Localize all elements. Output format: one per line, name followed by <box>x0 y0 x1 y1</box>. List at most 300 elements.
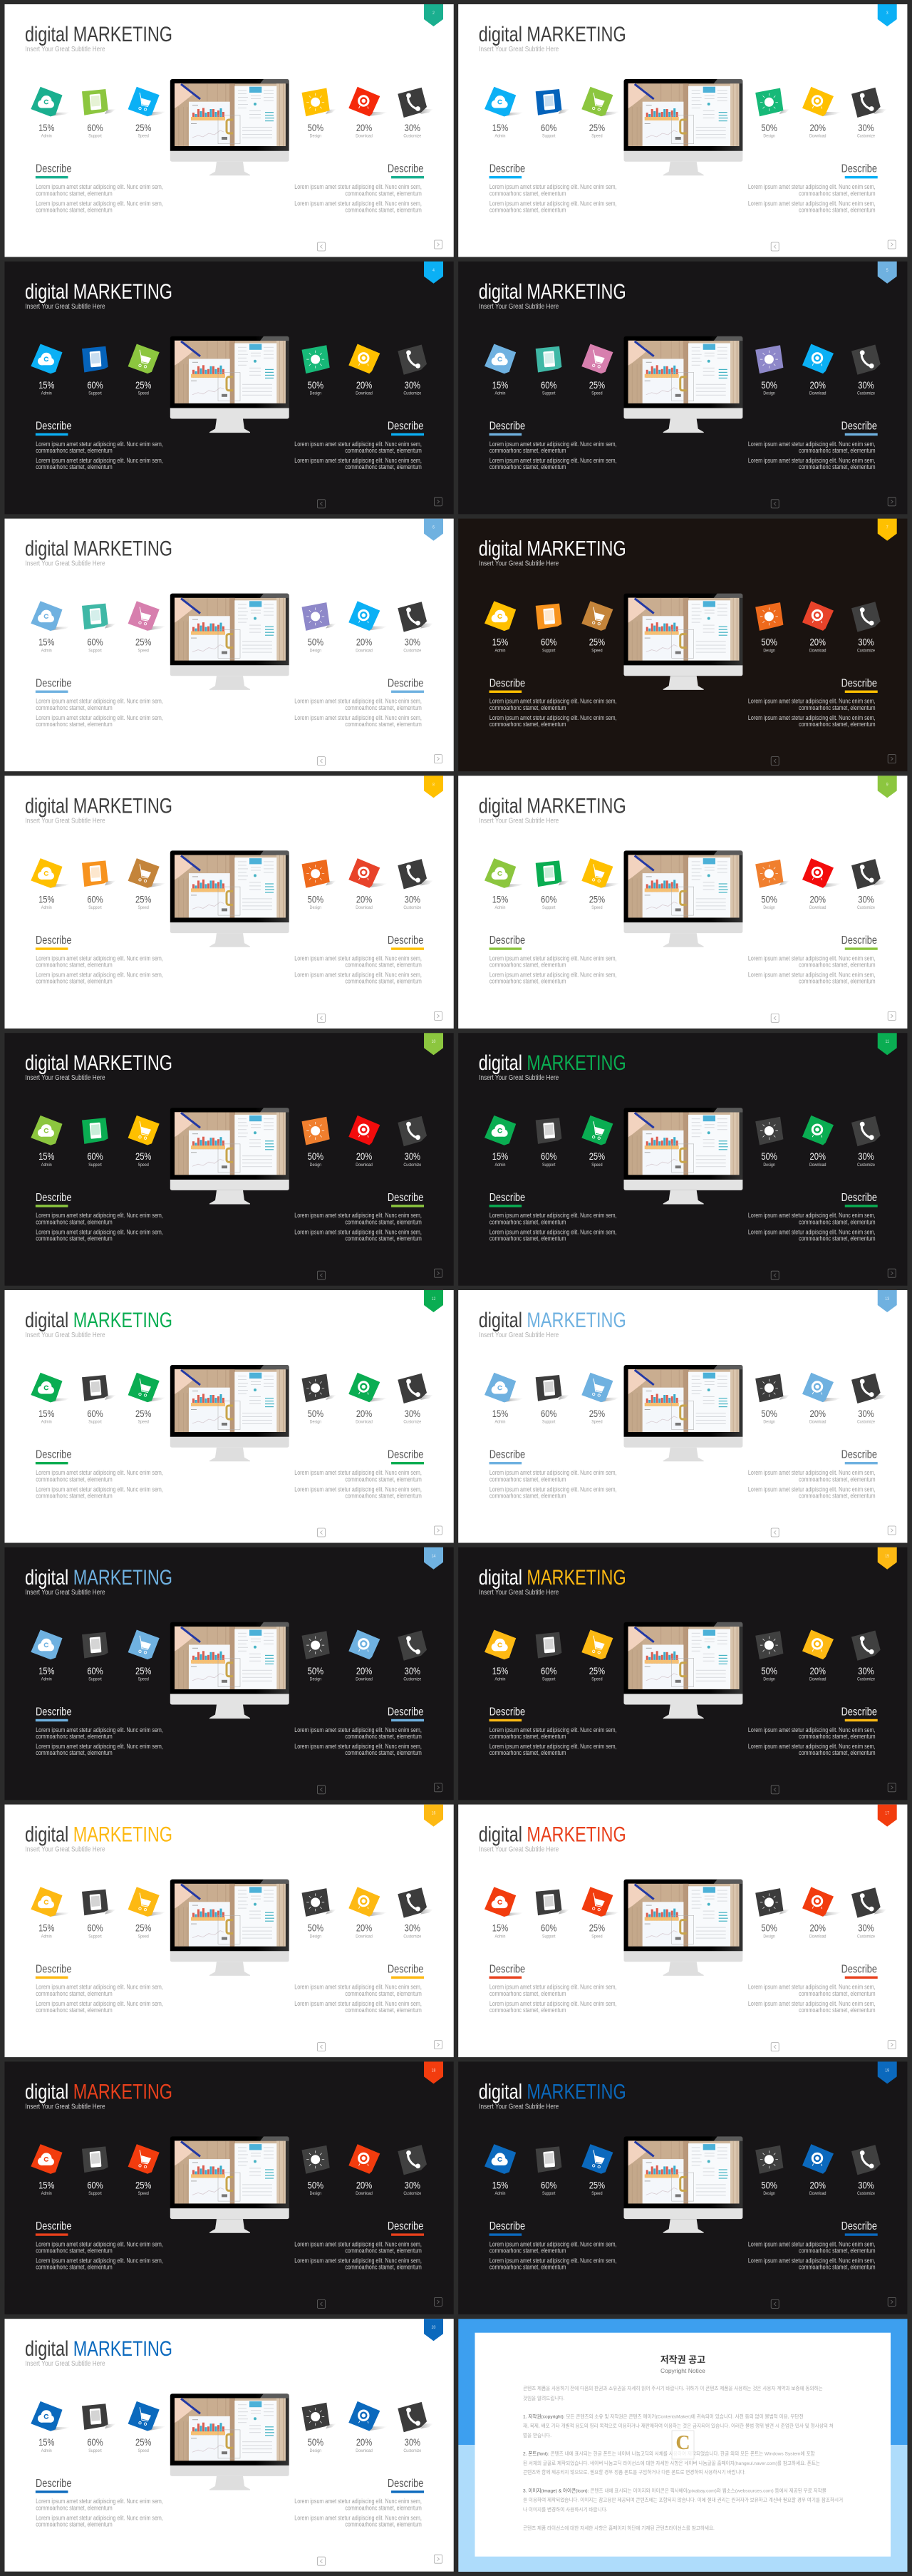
value: 20% <box>356 123 372 133</box>
stat: Speed <box>581 858 613 910</box>
heading: Describe <box>36 677 71 690</box>
left text block: commoarhonc stamet, elementum <box>489 2247 566 2255</box>
heading: Describe <box>36 1192 71 1204</box>
label: Speed <box>138 2448 149 2453</box>
label: Support <box>88 2448 102 2453</box>
heading: Describe <box>388 1963 423 1976</box>
left text block: commoarhonc stamet, elementum <box>36 463 113 470</box>
left text block: Lorem ipsum amet stetur adipiscing elit. Nunc enim sem, <box>489 714 617 721</box>
monitor <box>170 1365 289 1461</box>
label: Admin <box>495 1420 505 1425</box>
notice body: 2. 폰트(font): 콘텐츠 내에 표시되는 한글 폰트는 네이버 나눔고딕의 서체를 사용하여 제작되었습니다. 한글 외의 모든 폰트는 Windows System에 포함 <box>523 2451 815 2457</box>
stat: Speed <box>581 1373 613 1425</box>
underline <box>36 691 68 693</box>
previous arrow <box>318 1014 325 1022</box>
icon: sun <box>755 88 783 116</box>
page tag: 16 <box>432 1811 436 1816</box>
stat: Admin <box>31 344 63 396</box>
icon shadows <box>51 880 433 887</box>
value: 20% <box>810 637 826 648</box>
slide background <box>458 1547 907 1800</box>
left text block: Lorem ipsum amet stetur adipiscing elit. Nunc enim sem, <box>36 2257 163 2265</box>
stat: Customize <box>851 88 881 139</box>
icon shadows <box>51 1910 433 1917</box>
value: 25% <box>135 637 151 648</box>
left text block <box>36 677 163 728</box>
left text block <box>489 1448 617 1500</box>
subtitle: Insert Your Great Subtitle Here <box>479 1331 559 1339</box>
stat: Admin <box>484 1373 516 1425</box>
underline <box>845 433 878 436</box>
right text block: commoarhonc stamet, elementum <box>345 463 422 470</box>
title: digital MARKETING <box>479 794 626 818</box>
left text block: commoarhonc stamet, elementum <box>489 1990 566 1997</box>
right text block <box>748 2220 878 2271</box>
label: Admin <box>41 2192 52 2196</box>
left text block: commoarhonc stamet, elementum <box>36 1733 113 1740</box>
stat: Design <box>302 345 330 396</box>
right text block: commoarhonc stamet, elementum <box>345 721 422 728</box>
monitor <box>170 594 289 690</box>
right text block: Lorem ipsum amet stetur adipiscing elit. Nunc enim sem, <box>294 714 422 721</box>
right text block: Lorem ipsum amet stetur adipiscing elit. Nunc enim sem, <box>748 183 876 190</box>
left text block: commoarhonc stamet, elementum <box>36 721 113 728</box>
icon: phone <box>398 345 427 375</box>
underline <box>391 1719 424 1721</box>
slide background <box>458 4 907 257</box>
stat: Customize <box>851 859 881 910</box>
left text block: commoarhonc stamet, elementum <box>489 1235 566 1242</box>
page tag <box>424 4 443 26</box>
right text block: commoarhonc stamet, elementum <box>799 721 876 728</box>
left text block <box>36 2478 163 2528</box>
label: Customize <box>857 906 876 910</box>
icon: cart <box>128 601 160 631</box>
right text block: commoarhonc stamet, elementum <box>799 978 876 985</box>
icon: mobile <box>536 89 561 115</box>
notice body: 1. 저작권(copyright): 모든 콘텐츠의 소유 및 저작권은 콘텐츠 메이커(ContentsMaker)에 귀속되어 있습니다. 사전 동의 없이 불법적 이용, 무단전 <box>523 2413 804 2419</box>
value: 15% <box>38 2180 54 2191</box>
stat: Admin <box>31 87 63 139</box>
label: Design <box>763 1420 775 1425</box>
subtitle: Insert Your Great Subtitle Here <box>26 45 105 53</box>
icon: phone <box>851 345 881 375</box>
label: Download <box>809 134 826 139</box>
stat: Support <box>82 346 108 396</box>
left text block: Lorem ipsum amet stetur adipiscing elit. Nunc enim sem, <box>36 1486 163 1493</box>
panel: slide 16 <box>4 1805 454 2057</box>
label: Design <box>763 906 775 910</box>
stat: Customize <box>851 2145 881 2196</box>
icon shadows <box>51 2423 433 2431</box>
label: Support <box>88 649 102 654</box>
label: Design <box>763 649 775 654</box>
icon: target <box>348 2401 380 2431</box>
icon: sun <box>302 345 330 373</box>
icon: mobile <box>82 2404 108 2430</box>
value: 60% <box>87 2180 103 2191</box>
stat: Support <box>82 2404 108 2453</box>
subtitle: Insert Your Great Subtitle Here <box>26 1588 105 1596</box>
label: Download <box>809 2192 826 2196</box>
stat: Speed <box>128 858 160 910</box>
slide background <box>4 1033 454 1286</box>
icon: phone <box>398 88 427 118</box>
left text block <box>36 1192 163 1242</box>
label: Design <box>310 134 321 139</box>
icon: phone <box>851 1631 881 1661</box>
value: 30% <box>858 894 874 905</box>
icon: sun <box>302 1631 330 1659</box>
label: Admin <box>41 1420 52 1425</box>
label: Support <box>88 391 102 396</box>
left text block: Lorem ipsum amet stetur adipiscing elit. Nunc enim sem, <box>36 1743 163 1750</box>
icon: phone <box>851 602 881 632</box>
label: Customize <box>857 391 876 396</box>
icon: cart <box>581 1887 613 1917</box>
label: Speed <box>138 134 149 139</box>
right text block <box>294 677 424 728</box>
label: Download <box>809 1934 826 1939</box>
slide background <box>458 1290 907 1542</box>
right text block: Lorem ipsum amet stetur adipiscing elit. Nunc enim sem, <box>294 1726 422 1733</box>
icon: cart <box>128 87 160 116</box>
icon: cloud <box>31 858 63 888</box>
icon: target <box>348 601 380 631</box>
label: Customize <box>403 2192 422 2196</box>
slide background <box>4 1290 454 1542</box>
left text block: commoarhonc stamet, elementum <box>489 2264 566 2271</box>
stat: Support <box>536 604 561 654</box>
next arrow <box>888 755 896 763</box>
stat: Admin <box>484 87 516 139</box>
next arrow <box>888 1526 896 1535</box>
stat: Design <box>302 602 330 654</box>
icon: target <box>348 1629 380 1659</box>
label: Design <box>310 1420 321 1425</box>
icon: cloud <box>484 858 516 888</box>
panel: copyright notice <box>458 2319 908 2572</box>
label: Design <box>310 391 321 396</box>
icon: phone <box>398 2145 427 2175</box>
value: 20% <box>810 1151 826 1163</box>
stat: Customize <box>398 88 427 139</box>
stat: Customize <box>851 602 881 654</box>
label: Speed <box>138 391 149 396</box>
page tag <box>424 2319 443 2341</box>
left text block <box>36 2220 163 2271</box>
left text block <box>489 1192 617 1242</box>
left text block: commoarhonc stamet, elementum <box>36 1749 113 1756</box>
subtitle: Insert Your Great Subtitle Here <box>26 1845 105 1853</box>
value: 20% <box>810 123 826 133</box>
value: 60% <box>541 2180 556 2191</box>
left text block: commoarhonc stamet, elementum <box>36 2247 113 2255</box>
label: Speed <box>138 906 149 910</box>
underline <box>36 1977 68 1979</box>
label: Download <box>809 1163 826 1168</box>
stat: Speed <box>128 87 160 139</box>
label: Customize <box>857 1677 876 1682</box>
heading: Describe <box>841 934 877 947</box>
label: Speed <box>591 649 603 654</box>
subtitle: Insert Your Great Subtitle Here <box>26 1073 105 1081</box>
monitor <box>624 1108 742 1205</box>
left text block: commoarhonc stamet, elementum <box>489 1749 566 1756</box>
icon: cloud <box>484 2144 516 2174</box>
value: 30% <box>858 1408 874 1419</box>
icon: phone <box>851 859 881 889</box>
value: 25% <box>135 1666 151 1676</box>
page tag: 5 <box>886 268 888 273</box>
left text block: Lorem ipsum amet stetur adipiscing elit. Nunc enim sem, <box>489 1486 617 1493</box>
icon: target <box>802 1116 834 1145</box>
label: Support <box>88 1677 102 1682</box>
label: Speed <box>138 1163 149 1168</box>
left text block: Lorem ipsum amet stetur adipiscing elit. Nunc enim sem, <box>489 2000 617 2007</box>
icon: mobile <box>536 860 561 887</box>
icon: phone <box>398 1887 427 1918</box>
right text block: Lorem ipsum amet stetur adipiscing elit. Nunc enim sem, <box>748 1743 876 1750</box>
icon shadows <box>51 1395 433 1402</box>
right text block: Lorem ipsum amet stetur adipiscing elit. Nunc enim sem, <box>748 2000 876 2007</box>
value: 30% <box>405 1922 420 1934</box>
left text block <box>36 163 163 214</box>
stat: Support <box>82 604 108 654</box>
right text block: commoarhonc stamet, elementum <box>345 1990 422 1997</box>
right text block <box>748 1963 878 2014</box>
value: 25% <box>135 2180 151 2191</box>
heading: Describe <box>36 163 71 175</box>
heading: Describe <box>841 420 877 433</box>
slide background <box>4 1547 454 1800</box>
stat: Admin <box>31 2144 63 2196</box>
value: 30% <box>858 380 874 391</box>
stat: Download <box>348 1116 380 1168</box>
value: 60% <box>541 1922 556 1934</box>
label: Support <box>542 391 556 396</box>
stat: Customize <box>398 1374 427 1425</box>
label: Support <box>88 906 102 910</box>
stat: Support <box>82 1890 108 1939</box>
left text block <box>36 1963 163 2014</box>
underline <box>845 176 878 178</box>
stat: Design <box>302 860 330 910</box>
slide background <box>458 1805 907 2057</box>
stat: Design <box>302 1888 330 1939</box>
right text block: Lorem ipsum amet stetur adipiscing elit. Nunc enim sem, <box>748 1469 876 1476</box>
stat: Admin <box>31 2401 63 2453</box>
right text block: Lorem ipsum amet stetur adipiscing elit. Nunc enim sem, <box>294 2498 422 2505</box>
heading: Describe <box>36 2220 71 2233</box>
label: Admin <box>41 1163 52 1168</box>
icon: mobile <box>536 1890 561 1915</box>
page tag: 8 <box>432 783 435 788</box>
stat: Admin <box>484 601 516 654</box>
stat: Customize <box>851 345 881 396</box>
label: Download <box>356 906 373 910</box>
stat: Download <box>802 1373 834 1425</box>
left text block <box>489 1963 617 2014</box>
title: digital MARKETING <box>25 537 172 560</box>
icon: phone <box>398 602 427 632</box>
notice body: 나 이미지를 변경하여 사용하시기 바랍니다. <box>523 2506 608 2513</box>
value: 15% <box>38 1151 54 1163</box>
value: 50% <box>308 2437 323 2448</box>
value: 15% <box>492 380 508 391</box>
value: 25% <box>589 894 605 905</box>
underline <box>36 1462 68 1464</box>
value: 25% <box>135 380 151 391</box>
heading: Describe <box>489 934 525 947</box>
heading: Describe <box>388 420 423 433</box>
title: digital MARKETING <box>479 22 626 46</box>
right text block <box>294 934 424 985</box>
label: Download <box>356 1677 373 1682</box>
stat: Admin <box>31 1629 63 1682</box>
next arrow <box>435 1269 442 1277</box>
icon: phone <box>398 859 427 889</box>
left text block: commoarhonc stamet, elementum <box>36 2006 113 2014</box>
stat: Support <box>536 1375 561 1425</box>
right text block: commoarhonc stamet, elementum <box>345 1235 422 1242</box>
stat: Support <box>536 89 561 139</box>
icon: cart <box>581 1116 613 1145</box>
label: Design <box>763 1934 775 1939</box>
monitor <box>624 594 742 690</box>
right text block: Lorem ipsum amet stetur adipiscing elit. Nunc enim sem, <box>748 1486 876 1493</box>
left text block: Lorem ipsum amet stetur adipiscing elit. Nunc enim sem, <box>36 714 163 721</box>
icon: phone <box>398 2402 427 2432</box>
panel: slide 20 <box>4 2319 454 2572</box>
label: Speed <box>591 134 603 139</box>
stat: Admin <box>31 601 63 654</box>
previous arrow <box>318 757 325 766</box>
stat: Admin <box>484 344 516 396</box>
stat: Support <box>82 860 108 910</box>
left text block: commoarhonc stamet, elementum <box>36 2521 113 2528</box>
stat: Design <box>755 345 783 396</box>
label: Customize <box>403 134 422 139</box>
stat: Download <box>802 2144 834 2196</box>
heading: Describe <box>36 1963 71 1976</box>
icon: phone <box>851 2145 881 2175</box>
subtitle: Insert Your Great Subtitle Here <box>479 1845 559 1853</box>
value: 60% <box>87 1408 103 1419</box>
value: 25% <box>135 1151 151 1163</box>
left text block: Lorem ipsum amet stetur adipiscing elit. Nunc enim sem, <box>36 698 163 705</box>
next arrow <box>888 240 896 249</box>
stat: Speed <box>581 1629 613 1682</box>
label: Customize <box>403 391 422 396</box>
right text block: Lorem ipsum amet stetur adipiscing elit. Nunc enim sem, <box>294 1469 422 1476</box>
value: 20% <box>356 2180 372 2191</box>
label: Admin <box>41 649 52 654</box>
heading: Describe <box>489 1706 525 1719</box>
left text block: Lorem ipsum amet stetur adipiscing elit. Nunc enim sem, <box>489 457 617 464</box>
value: 60% <box>87 2437 103 2448</box>
stat: Design <box>755 1117 783 1168</box>
underline <box>489 433 522 436</box>
right text block: commoarhonc stamet, elementum <box>799 1219 876 1226</box>
icon: cart <box>128 1116 160 1145</box>
value: 50% <box>761 123 777 133</box>
panel: slide 10 <box>4 1033 454 1286</box>
right text block: commoarhonc stamet, elementum <box>345 1476 422 1483</box>
notice body <box>523 2385 843 2531</box>
next arrow <box>435 2297 442 2306</box>
underline <box>391 947 424 950</box>
icon: mobile <box>82 89 108 115</box>
right text block: commoarhonc stamet, elementum <box>799 1493 876 1500</box>
stat: Download <box>802 858 834 910</box>
label: Download <box>356 1934 373 1939</box>
right text block <box>294 420 424 470</box>
icon: target <box>348 1373 380 1402</box>
panel: slide 14 <box>4 1547 454 1800</box>
right text block: commoarhonc stamet, elementum <box>345 1733 422 1740</box>
value: 15% <box>492 894 508 905</box>
next arrow <box>888 2297 896 2306</box>
value: 15% <box>38 1666 54 1676</box>
heading: Describe <box>489 677 525 690</box>
label: Support <box>542 649 556 654</box>
label: Support <box>88 1163 102 1168</box>
notice title: 저작권 공고 <box>660 2354 705 2365</box>
slide background <box>4 2061 454 2314</box>
icon: cart <box>581 858 613 888</box>
next arrow <box>888 1269 896 1277</box>
value: 60% <box>541 380 556 391</box>
right text block: commoarhonc stamet, elementum <box>799 207 876 214</box>
icon: target <box>802 1373 834 1402</box>
right text block <box>294 1963 424 2014</box>
subtitle: Insert Your Great Subtitle Here <box>479 1073 559 1081</box>
left text block: commoarhonc stamet, elementum <box>489 721 566 728</box>
icon: cloud <box>31 2401 63 2431</box>
next arrow <box>435 755 442 763</box>
heading: Describe <box>841 1192 877 1204</box>
icon shadows <box>505 1395 887 1402</box>
stat: Download <box>348 858 380 910</box>
right text block: Lorem ipsum amet stetur adipiscing elit. Nunc enim sem, <box>294 183 422 190</box>
value: 50% <box>761 1666 777 1676</box>
previous arrow <box>318 242 325 251</box>
page tag <box>878 1547 897 1570</box>
notice body: 재, 복제, 배포 기타 개별적 용도의 영리 목적으로 이용하거나 재판매하여 이용하는 것은 금지되어 있습니다. 이러한 불법 행위 발견 시 준엄한 민사 및 형사상의 처 <box>523 2423 834 2429</box>
stat: Design <box>755 602 783 654</box>
value: 25% <box>589 1151 605 1163</box>
page tag: 12 <box>432 1297 435 1302</box>
label: Support <box>542 2192 556 2196</box>
underline <box>391 691 424 693</box>
notice body: 콘텐츠 제품 라이선스에 대한 자세한 사항은 홈페이지 하단에 기재된 콘텐츠라이선스를 참고하세요. <box>523 2525 715 2531</box>
label: Speed <box>138 1934 149 1939</box>
value: 60% <box>87 1151 103 1163</box>
right text block: commoarhonc stamet, elementum <box>345 207 422 214</box>
page tag <box>424 519 443 541</box>
icon: cloud <box>484 87 516 117</box>
value: 15% <box>492 637 508 648</box>
left text block: Lorem ipsum amet stetur adipiscing elit. Nunc enim sem, <box>489 1469 617 1476</box>
stat: Design <box>302 1631 330 1682</box>
heading: Describe <box>841 677 877 690</box>
icon: cart <box>128 858 160 888</box>
stat: Speed <box>128 344 160 396</box>
label: Download <box>356 134 373 139</box>
label: Download <box>356 2448 373 2453</box>
icon: mobile <box>536 604 561 629</box>
